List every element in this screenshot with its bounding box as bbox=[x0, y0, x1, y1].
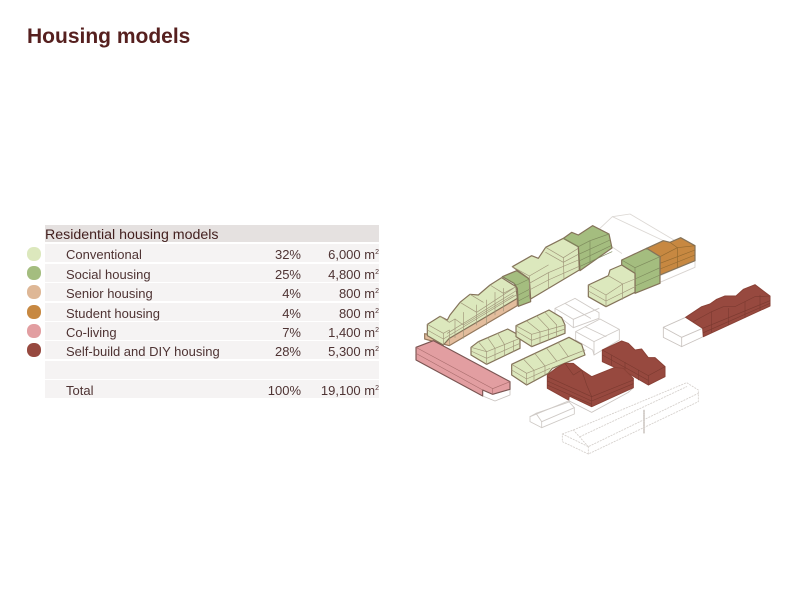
buildings: right self-build row with white block bbox=[663, 285, 770, 347]
buildings: right group with student housing bbox=[588, 238, 695, 307]
row: conventional: Conventional bbox=[66, 247, 142, 262]
small outlined building bbox=[530, 401, 574, 428]
row: self-build and DIY housing: 5,300 m2 bbox=[328, 344, 379, 359]
row: total: 100% bbox=[268, 383, 301, 398]
social housing block right bbox=[563, 226, 612, 271]
self-build block upper bbox=[602, 341, 665, 385]
legend swatch: self-build and DIY housing bbox=[27, 343, 41, 357]
table heading bbox=[45, 225, 379, 242]
self-build L-shaped block bbox=[547, 363, 633, 407]
empty table row bbox=[45, 361, 379, 379]
row: conventional: 32% bbox=[275, 247, 301, 262]
white block bbox=[663, 317, 703, 347]
row: co-living: 7% bbox=[282, 325, 301, 340]
row: total: Total bbox=[66, 383, 93, 398]
white base under co-living bbox=[483, 389, 510, 401]
legend swatch: senior housing bbox=[27, 285, 41, 299]
co-living block bbox=[416, 341, 510, 396]
legend swatch: student housing bbox=[27, 305, 41, 319]
buildings: self-build central blocks bbox=[547, 341, 665, 412]
buildings: central white and outlined blocks bbox=[530, 298, 698, 454]
buildings: long conventional and social row bbox=[425, 226, 612, 346]
legend swatch: social housing bbox=[27, 266, 41, 280]
conventional block B bbox=[516, 310, 565, 347]
row: social housing: Social housing bbox=[66, 267, 151, 282]
table heading: Residential housing models bbox=[45, 227, 219, 243]
row: self-build and DIY housing: Self-build and DIY housing bbox=[66, 344, 220, 359]
row: student housing bbox=[45, 303, 379, 321]
white block lower bbox=[576, 319, 619, 355]
conventional block bbox=[588, 265, 635, 307]
row: self-build and DIY housing bbox=[45, 341, 379, 359]
row: conventional: 6,000 m2 bbox=[328, 247, 379, 262]
row: social housing: 25% bbox=[275, 267, 301, 282]
conventional block C bbox=[512, 337, 585, 385]
buildings: conventional blocks A, B and C bbox=[471, 310, 585, 385]
row: senior housing: 800 m2 bbox=[339, 286, 379, 301]
site outline behind the right group bbox=[600, 214, 677, 253]
row: co-living: 1,400 m2 bbox=[328, 325, 379, 340]
conventional stepped block bbox=[427, 278, 517, 345]
white base bbox=[660, 261, 695, 282]
row: senior housing: Senior housing bbox=[66, 286, 153, 301]
row: social housing bbox=[45, 264, 379, 282]
row: co-living bbox=[45, 322, 379, 340]
row: student housing: 4% bbox=[282, 306, 301, 321]
conventional middle block bbox=[512, 238, 579, 299]
row: self-build and DIY housing: 28% bbox=[275, 344, 301, 359]
row: student housing: Student housing bbox=[66, 306, 160, 321]
social housing block bbox=[622, 248, 660, 293]
dotted outlined building bbox=[562, 383, 698, 454]
row: conventional bbox=[45, 244, 379, 262]
self-build block right bbox=[686, 285, 770, 337]
legend swatch: conventional bbox=[27, 247, 41, 261]
senior housing base bbox=[425, 298, 517, 346]
row: total: 19,100 m2 bbox=[321, 383, 379, 398]
row: student housing: 800 m2 bbox=[339, 306, 379, 321]
row: social housing: 4,800 m2 bbox=[328, 267, 379, 282]
buildings: pink co-living block bbox=[416, 341, 510, 401]
row: total bbox=[45, 380, 379, 398]
legend swatch: co-living bbox=[27, 324, 41, 338]
white block upper bbox=[555, 298, 599, 328]
white base under L-shaped block bbox=[569, 388, 633, 412]
student housing block bbox=[647, 238, 695, 275]
row: senior housing bbox=[45, 283, 379, 301]
title: Housing models bbox=[27, 25, 190, 48]
row: senior housing: 4% bbox=[282, 286, 301, 301]
row: co-living: Co-living bbox=[66, 325, 117, 340]
conventional block A bbox=[471, 329, 520, 364]
social housing block left bbox=[502, 271, 531, 306]
